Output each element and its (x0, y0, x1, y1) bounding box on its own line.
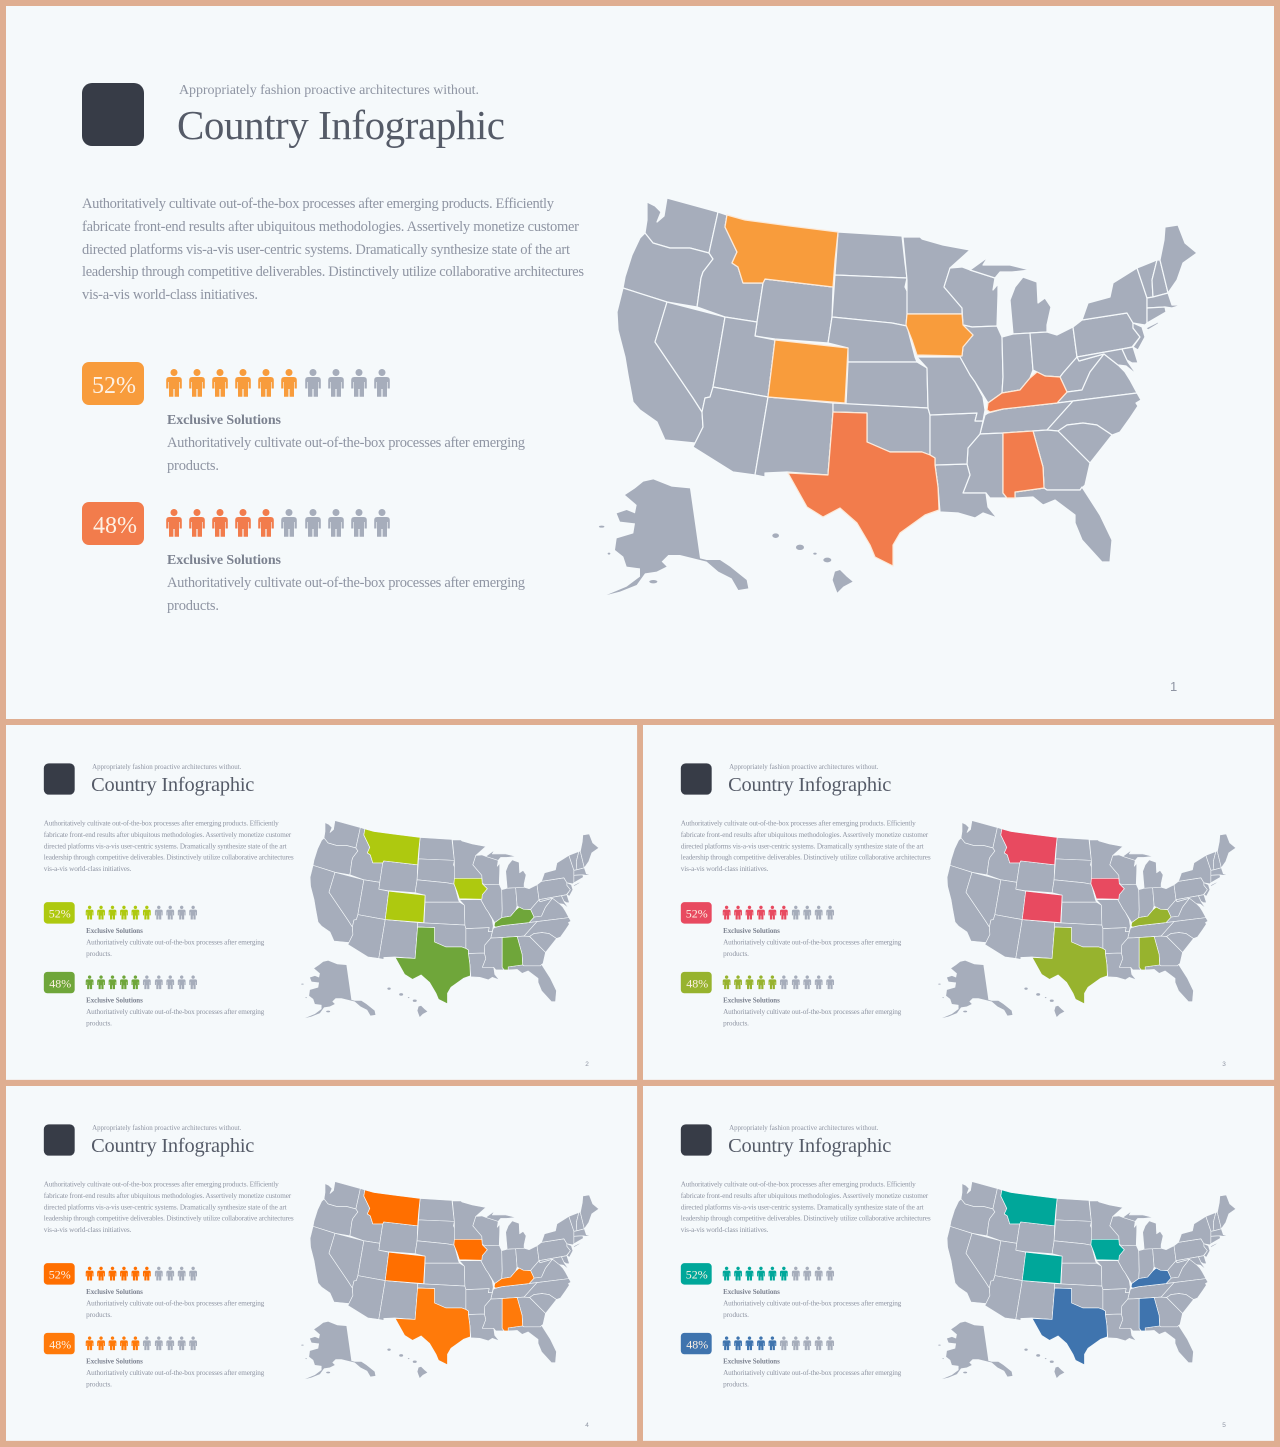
intro paragraph: fabricate front-end results after ubiquitous methodologies. Assertively monetize customer (681, 831, 929, 839)
stat 52%: Exclusive Solutions (86, 927, 143, 935)
intro paragraph: fabricate front-end results after ubiquitous methodologies. Assertively monetize customer (681, 1192, 929, 1200)
intro paragraph: vis-a-vis world-class initiatives. (82, 287, 258, 303)
stat 48%: Authoritatively cultivate out-of-the-box processes after emerging (723, 1369, 902, 1377)
intro paragraph: Authoritatively cultivate out-of-the-box processes after emerging products. Efficiently (44, 820, 279, 828)
stat 48%: Exclusive Solutions (86, 997, 143, 1005)
stat 52% (44, 902, 265, 958)
stat 48%: 48% (686, 1337, 708, 1351)
subtitle: Appropriately fashion proactive architectures without. (92, 763, 242, 771)
stat 48% (681, 1333, 902, 1389)
stat 48%: Authoritatively cultivate out-of-the-box processes after emerging (723, 1008, 902, 1016)
stat 48%: Authoritatively cultivate out-of-the-box processes after emerging (86, 1369, 265, 1377)
intro paragraph (681, 1181, 931, 1234)
panel 3: red and olive (643, 725, 1274, 1080)
panel 4: vivid orange (6, 1086, 637, 1441)
logo square (681, 1124, 712, 1156)
stat 48% (44, 972, 265, 1028)
page number: 4 (585, 1422, 589, 1429)
intro paragraph: directed platforms vis-a-vis user-centric systems. Dramatically synthesize state of the art (44, 1203, 287, 1211)
stat 48% (82, 502, 525, 614)
title: Country Infographic (728, 774, 891, 796)
stat 52%: Exclusive Solutions (723, 1288, 780, 1296)
stat 48%: products. (723, 1020, 749, 1028)
US map (599, 198, 1197, 595)
stat 48%: Authoritatively cultivate out-of-the-box processes after emerging (167, 575, 525, 591)
stat 48%: 48% (686, 976, 708, 990)
stat 52%: 52% (49, 1268, 71, 1282)
logo square (681, 763, 712, 795)
stat 48%: products. (86, 1381, 112, 1389)
intro paragraph: leadership through competitive deliverables. Distinctively utilize collaborative architectures (681, 1214, 931, 1222)
intro paragraph (44, 820, 294, 873)
stat 48%: Authoritatively cultivate out-of-the-box processes after emerging (86, 1008, 265, 1016)
intro paragraph: vis-a-vis world-class initiatives. (681, 1226, 769, 1234)
stat 52% (44, 1263, 265, 1319)
intro paragraph: vis-a-vis world-class initiatives. (44, 1226, 132, 1234)
US map (938, 1182, 1236, 1379)
US map (301, 821, 599, 1018)
intro paragraph: fabricate front-end results after ubiquitous methodologies. Assertively monetize customer (44, 1192, 292, 1200)
intro paragraph: Authoritatively cultivate out-of-the-box processes after emerging products. Efficiently (44, 1181, 279, 1189)
intro paragraph: leadership through competitive deliverables. Distinctively utilize collaborative architectures (44, 1214, 294, 1222)
US map (301, 1182, 599, 1379)
intro paragraph: directed platforms vis-a-vis user-centric systems. Dramatically synthesize state of the art (681, 842, 924, 850)
stat 52%: products. (86, 1311, 112, 1319)
intro paragraph (82, 196, 584, 303)
stat 52%: Exclusive Solutions (86, 1288, 143, 1296)
stat 48%: 48% (49, 976, 71, 990)
intro paragraph: vis-a-vis world-class initiatives. (681, 865, 769, 873)
stat 52%: Exclusive Solutions (167, 413, 282, 428)
intro paragraph: leadership through competitive deliverables. Distinctively utilize collaborative architectures (82, 264, 584, 280)
intro paragraph: directed platforms vis-a-vis user-centric systems. Dramatically synthesize state of the art (681, 1203, 924, 1211)
stat 48%: 48% (93, 513, 137, 539)
intro paragraph (44, 1181, 294, 1234)
stat 48%: Exclusive Solutions (86, 1358, 143, 1366)
stat 52%: 52% (686, 1268, 708, 1282)
subtitle: Appropriately fashion proactive architectures without. (729, 763, 879, 771)
US map (938, 821, 1236, 1018)
stat 48%: products. (86, 1020, 112, 1028)
stat 48%: Exclusive Solutions (167, 553, 282, 568)
subtitle: Appropriately fashion proactive architectures without. (729, 1124, 879, 1132)
page number: 3 (1222, 1061, 1226, 1068)
intro paragraph: leadership through competitive deliverables. Distinctively utilize collaborative architectures (681, 853, 931, 861)
stat 48%: 48% (49, 1337, 71, 1351)
intro paragraph: directed platforms vis-a-vis user-centric systems. Dramatically synthesize state of the art (44, 842, 287, 850)
stat 48%: Exclusive Solutions (723, 1358, 780, 1366)
stat 52% (681, 902, 902, 958)
title: Country Infographic (177, 102, 505, 148)
stat 52%: Authoritatively cultivate out-of-the-box processes after emerging (723, 938, 902, 946)
intro paragraph (681, 820, 931, 873)
stat 52%: products. (86, 950, 112, 958)
stat 52%: Exclusive Solutions (723, 927, 780, 935)
stat 52% (82, 362, 525, 474)
title: Country Infographic (91, 1135, 254, 1157)
stat 52%: Authoritatively cultivate out-of-the-box processes after emerging (723, 1299, 902, 1307)
intro paragraph: fabricate front-end results after ubiquitous methodologies. Assertively monetize customer (44, 831, 292, 839)
logo square (44, 763, 75, 795)
intro paragraph: Authoritatively cultivate out-of-the-box processes after emerging products. Efficiently (681, 1181, 916, 1189)
stat 48%: Exclusive Solutions (723, 997, 780, 1005)
panel 2: green (6, 725, 637, 1080)
stat 48% (681, 972, 902, 1028)
stat 52%: products. (167, 458, 219, 474)
subtitle: Appropriately fashion proactive architectures without. (179, 83, 479, 98)
intro paragraph: Authoritatively cultivate out-of-the-box processes after emerging products. Efficiently (82, 196, 555, 212)
intro paragraph: Authoritatively cultivate out-of-the-box processes after emerging products. Efficiently (681, 820, 916, 828)
intro paragraph: vis-a-vis world-class initiatives. (44, 865, 132, 873)
intro paragraph: leadership through competitive deliverables. Distinctively utilize collaborative architectures (44, 853, 294, 861)
stat 52%: Authoritatively cultivate out-of-the-box processes after emerging (167, 435, 525, 451)
stat 52%: Authoritatively cultivate out-of-the-box processes after emerging (86, 1299, 265, 1307)
stat 52%: 52% (92, 373, 136, 399)
stat 52%: Authoritatively cultivate out-of-the-box processes after emerging (86, 938, 265, 946)
logo square (44, 1124, 75, 1156)
panel 5: teal and blue (643, 1086, 1274, 1441)
stat 52%: products. (723, 950, 749, 958)
stat 48% (44, 1333, 265, 1389)
subtitle: Appropriately fashion proactive architectures without. (92, 1124, 242, 1132)
stat 48%: products. (167, 598, 219, 614)
intro paragraph: fabricate front-end results after ubiquitous methodologies. Assertively monetize customer (82, 219, 579, 235)
page number: 2 (585, 1061, 589, 1068)
stat 52% (681, 1263, 902, 1319)
logo square (82, 83, 144, 146)
title: Country Infographic (91, 774, 254, 796)
page number: 1 (1170, 679, 1177, 694)
intro paragraph: directed platforms vis-a-vis user-centric systems. Dramatically synthesize state of the art (82, 242, 570, 258)
title: Country Infographic (728, 1135, 891, 1157)
stat 52%: products. (723, 1311, 749, 1319)
stat 52%: 52% (686, 907, 708, 921)
panel 1: orange (6, 6, 1274, 719)
page number: 5 (1222, 1422, 1226, 1429)
stat 48%: products. (723, 1381, 749, 1389)
stat 52%: 52% (49, 907, 71, 921)
